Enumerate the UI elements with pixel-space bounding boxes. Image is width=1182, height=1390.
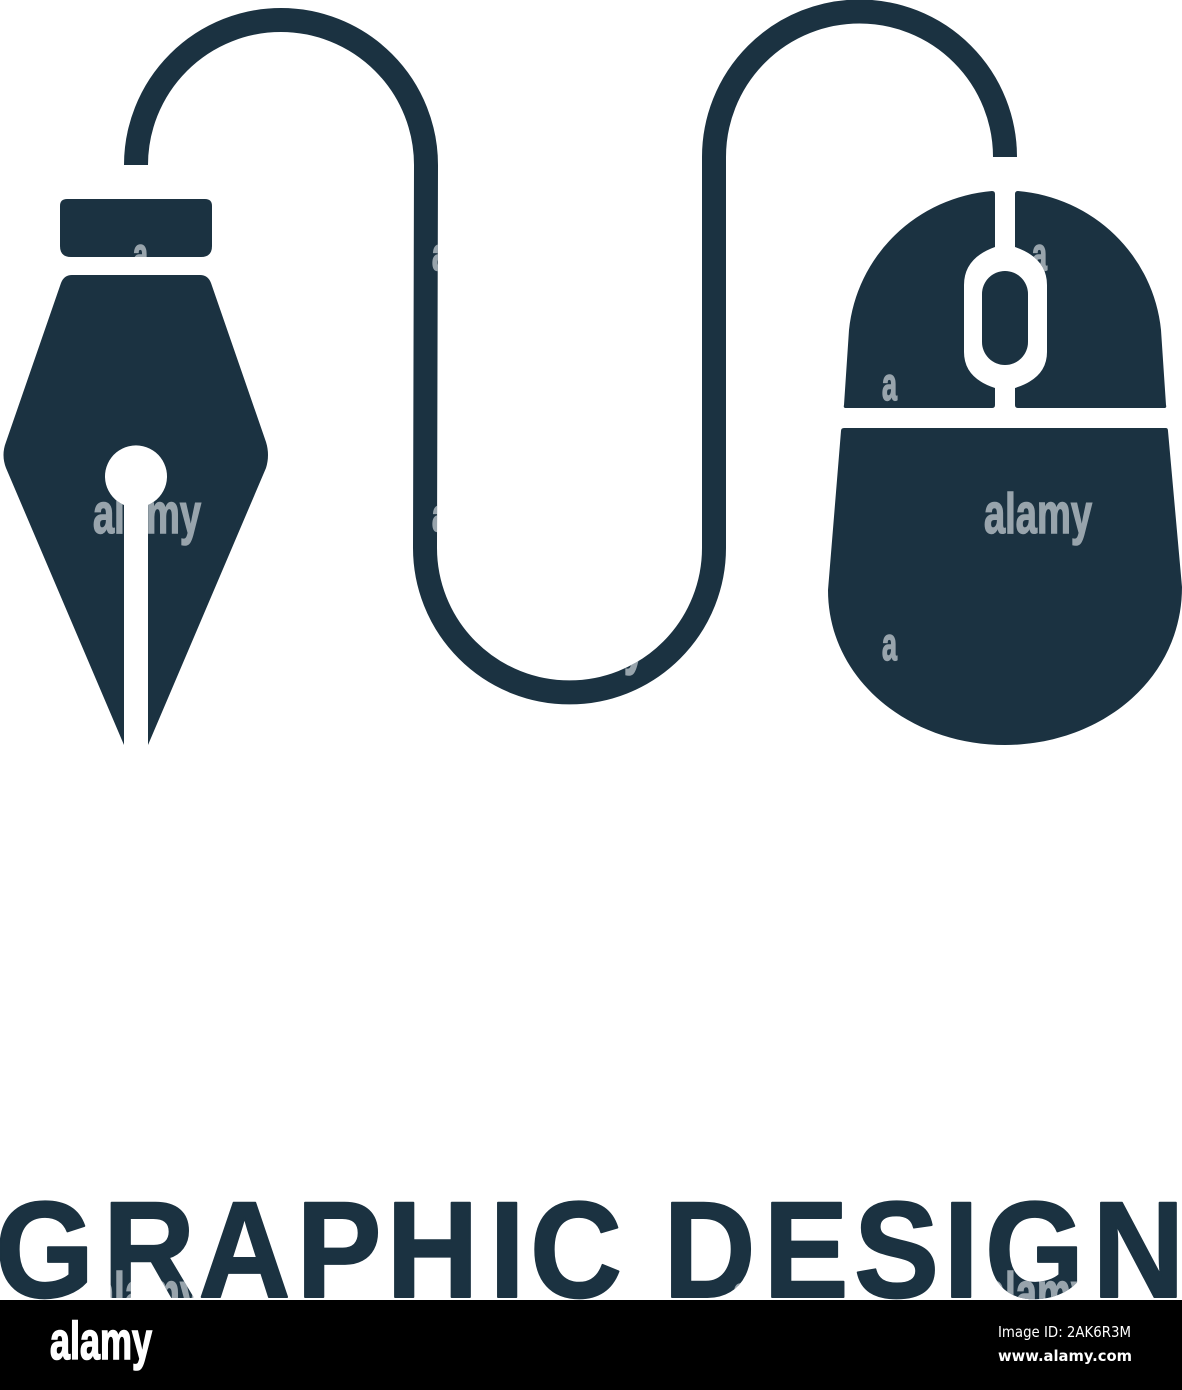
watermark marks over dark shapes bbox=[93, 228, 1092, 1325]
watermark marks over dark shapes: alamy bbox=[93, 1261, 201, 1325]
watermark marks over dark shapes: a bbox=[882, 358, 897, 410]
watermark marks over dark shapes: alamy bbox=[93, 482, 201, 546]
footer logo: alamy bbox=[50, 1312, 152, 1371]
watermark marks over dark shapes: a bbox=[733, 1267, 748, 1319]
watermark marks over dark shapes: alamy bbox=[984, 482, 1092, 546]
image id: Image ID: 2AK6R3M bbox=[998, 1323, 1131, 1341]
watermark marks over dark shapes: a bbox=[432, 489, 447, 541]
watermark marks over dark shapes: alamy bbox=[984, 1261, 1092, 1325]
watermark marks over dark shapes: a bbox=[1032, 228, 1047, 280]
icon: pen nib bbox=[4, 199, 268, 745]
watermark marks over dark shapes: alamy bbox=[537, 612, 645, 676]
website: www.alamy.com bbox=[998, 1347, 1132, 1365]
watermark marks over dark shapes: a bbox=[432, 228, 447, 280]
title: GRAPHIC DESIGN bbox=[0, 1174, 1182, 1327]
icon: computer mouse bbox=[828, 191, 1182, 745]
cable connecting pen nib and mouse bbox=[136, 11, 1005, 692]
watermark marks over dark shapes: a bbox=[133, 228, 148, 280]
footer bar bbox=[0, 1300, 1182, 1390]
watermark marks over dark shapes: a bbox=[882, 618, 897, 670]
